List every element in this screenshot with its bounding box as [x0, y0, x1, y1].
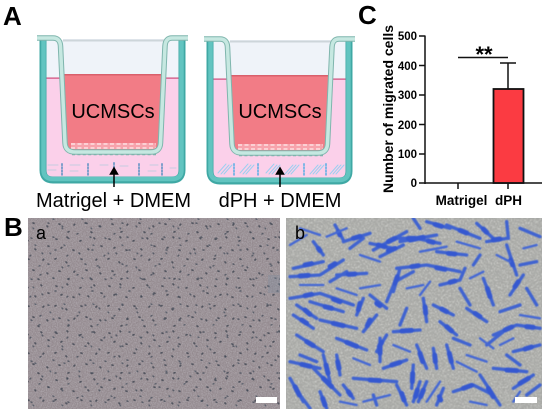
scale bar	[515, 397, 537, 403]
matrigel fibres	[48, 163, 176, 175]
panel label B: B	[4, 212, 23, 242]
y axis with ticks: 200	[398, 120, 417, 132]
panel A: transwell with Matrigel	[36, 38, 191, 212]
bar chart: number of migrated cells: dPH	[495, 193, 522, 208]
significance stars: **	[475, 42, 493, 67]
panel label C: C	[358, 0, 377, 30]
y axis with ticks: 500	[398, 31, 417, 43]
bar chart: number of migrated cells	[380, 25, 542, 208]
transwell well diagram	[37, 38, 188, 180]
sub-label a: a	[36, 223, 47, 243]
dPH fibres	[218, 164, 344, 175]
arrow	[110, 168, 118, 187]
cell label: UCMSCs	[71, 101, 155, 123]
transwell well diagram	[204, 39, 355, 181]
panel A: transwell with dPH	[204, 39, 355, 212]
y axis with ticks: 300	[398, 90, 417, 102]
y axis title: Number of migrated cells	[380, 25, 396, 193]
arrow	[276, 168, 284, 187]
condition label: dPH + DMEM	[219, 190, 341, 212]
y axis with ticks: 0	[411, 178, 417, 190]
x labels: Matrigel	[436, 193, 487, 208]
error bar	[500, 63, 516, 89]
panel label A: A	[3, 1, 22, 31]
y axis with ticks	[398, 31, 542, 190]
significance line	[458, 56, 508, 58]
migrated blue cells	[290, 218, 540, 408]
sub-label b: b	[295, 223, 305, 243]
y axis with ticks: 400	[398, 61, 417, 73]
micrograph b: dPH	[286, 218, 542, 409]
bar: dPH	[494, 89, 524, 183]
condition label: Matrigel + DMEM	[36, 190, 191, 212]
micrograph a: Matrigel	[28, 218, 280, 409]
cell label: UCMSCs	[238, 101, 322, 123]
x ticks	[458, 183, 508, 189]
y axis with ticks: 100	[398, 149, 417, 161]
scale bar	[256, 397, 277, 403]
